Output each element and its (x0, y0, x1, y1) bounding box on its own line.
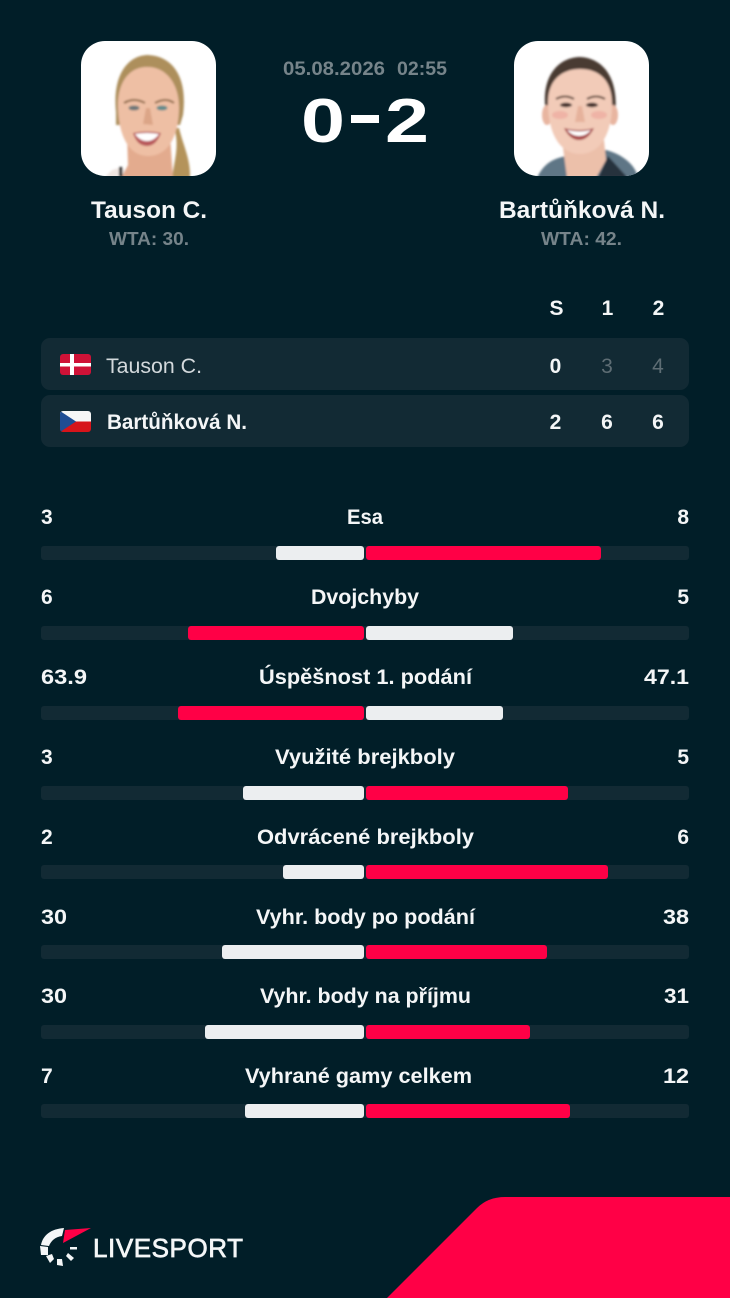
score row: Tauson C. (41, 338, 689, 390)
stat: Využité brejkboly: Využité brejkboly (275, 746, 455, 769)
table header: sets: 2 (653, 297, 664, 320)
score row: Tauson C.: 3 (601, 355, 613, 378)
stat: Vyhrané gamy celkem (41, 1065, 689, 1118)
logo: Livesport: LIVESPORT (93, 1233, 243, 1263)
stat: Vyhr. body na příjmu: 30 (41, 985, 67, 1008)
stat: Vyhr. body na příjmu (41, 985, 689, 1039)
stat: Dvojchyby: Dvojchyby (311, 586, 419, 609)
stat: Odvrácené brejkboly: 6 (677, 826, 689, 849)
table header: sets (549, 297, 664, 320)
score row: Tauson C.: Tauson C. (106, 355, 202, 378)
stat: Vyhrané gamy celkem: Vyhrané gamy celkem (245, 1065, 472, 1088)
score row: Bartůňková N.: Bartůňková N. (107, 411, 247, 434)
flag: Denmark (60, 354, 91, 375)
heading: player names and ranks: WTA: 30. (109, 229, 189, 249)
stat: Vyhr. body po podání: Vyhr. body po podání (256, 906, 476, 929)
stat: Odvrácené brejkboly (41, 826, 689, 879)
photo: Tauson C. (81, 41, 216, 178)
table header: sets: S (549, 297, 564, 320)
match score: 0 (301, 87, 345, 156)
match score: 2 (385, 87, 429, 156)
stat: Esa: 8 (677, 506, 689, 529)
stat: Dvojchyby: 6 (41, 586, 53, 609)
score row: Bartůňková N.: 6 (652, 411, 664, 434)
stat: Dvojchyby: 5 (677, 586, 689, 609)
stat: Vyhr. body po podání: 38 (663, 906, 689, 929)
stat: Využité brejkboly: 5 (677, 746, 689, 769)
score row: Bartůňková N.: 2 (550, 411, 561, 434)
stat: Esa: 3 (41, 506, 53, 529)
stat: Vyhr. body na příjmu: Vyhr. body na příjmu (260, 985, 471, 1008)
stat: Vyhrané gamy celkem: 7 (41, 1065, 53, 1088)
stat: Dvojchyby (41, 586, 689, 640)
stat: Odvrácené brejkboly: 2 (41, 826, 53, 849)
stat: Úspěšnost 1. podání: 47.1 (644, 666, 689, 689)
score row: Bartůňková N.: 6 (601, 411, 613, 434)
stat: Vyhrané gamy celkem: 12 (663, 1065, 689, 1088)
score row: Bartůňková N. (41, 395, 689, 447)
heading: player names and ranks: WTA: 42. (541, 229, 622, 249)
stat: Vyhr. body po podání: 30 (41, 906, 67, 929)
date and time: 05.08.2026 (283, 58, 385, 80)
score row: Tauson C.: 0 (550, 355, 561, 378)
logo: Livesport (40, 1228, 243, 1266)
score row: Tauson C.: 4 (652, 355, 664, 378)
match score (301, 87, 429, 156)
stat: Využité brejkboly: 3 (41, 746, 53, 769)
stat: Využité brejkboly (41, 746, 689, 800)
stat: Vyhr. body na příjmu: 31 (664, 985, 689, 1008)
date and time: 02:55 (397, 58, 447, 80)
heading: player names and ranks: Tauson C. (91, 197, 207, 224)
stat: Esa: Esa (347, 506, 383, 529)
stat: Úspěšnost 1. podání: 63.9 (41, 666, 87, 689)
stat: Odvrácené brejkboly: Odvrácené brejkboly (257, 826, 474, 849)
date and time (283, 58, 447, 80)
heading: player names and ranks (91, 197, 665, 249)
stat: Vyhr. body po podání (41, 906, 689, 959)
table header: sets: 1 (602, 297, 614, 320)
footer corner shape (387, 1197, 730, 1298)
photo: Bartůňková N. (514, 41, 649, 178)
stat: Úspěšnost 1. podání: Úspěšnost 1. podání (259, 665, 473, 689)
icon: speedometer (40, 1228, 91, 1266)
stat: Úspěšnost 1. podání (41, 665, 689, 720)
heading: player names and ranks: Bartůňková N. (499, 197, 665, 224)
stat: Esa (41, 506, 689, 560)
flag: Czechia (60, 411, 91, 432)
